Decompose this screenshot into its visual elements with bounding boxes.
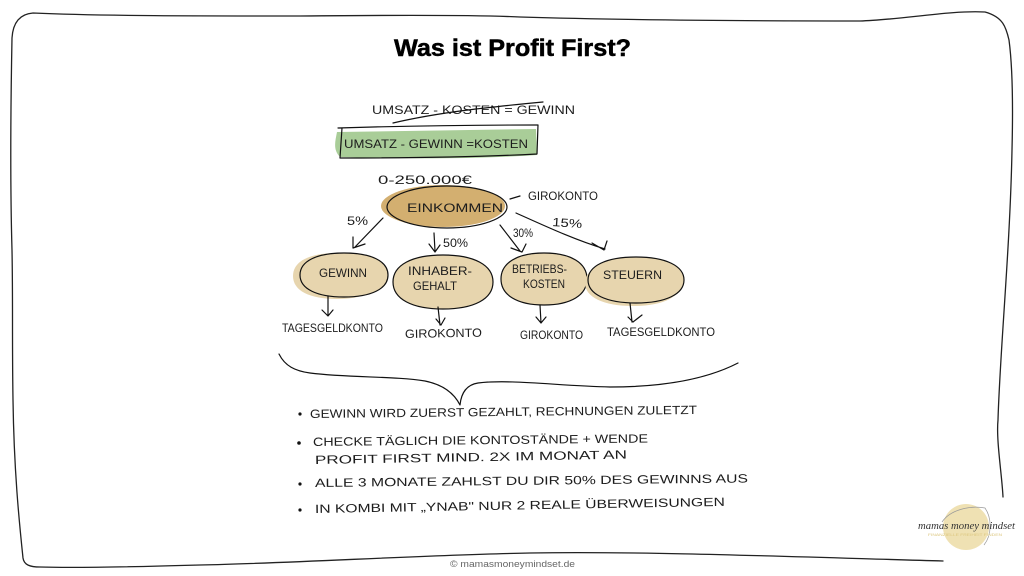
bubble: Gewinn xyxy=(293,253,388,299)
arrow and label: Tagesgeldkonto left xyxy=(282,296,383,335)
bullet list xyxy=(297,403,748,516)
crossed-out formula xyxy=(372,102,575,123)
crossed-out formula: UMSATZ - KOSTEN = GEWINN xyxy=(372,103,575,117)
income account label: GIROKONTO xyxy=(528,189,598,203)
curly brace xyxy=(279,354,738,405)
arrow: 30 percent to Betriebskosten: 30% xyxy=(513,226,533,240)
bubble: Betriebskosten xyxy=(501,253,587,305)
title: Was ist Profit First? xyxy=(394,35,631,62)
bubble: Inhabergehalt: GEHALT xyxy=(413,279,458,293)
bubble: Inhabergehalt: INHABER- xyxy=(408,264,472,278)
arrow and label: Tagesgeldkonto right xyxy=(607,303,715,339)
income range label: 0-250.000€ xyxy=(378,173,472,187)
copyright: © mamasmoneymindset.de xyxy=(450,559,575,570)
income ellipse: EINKOMMEN xyxy=(407,201,503,215)
arrow and label: Tagesgeldkonto right: TAGESGELDKONTO xyxy=(607,325,715,339)
logo: FINANZIELLE FREIHEIT FINDEN xyxy=(928,532,1002,537)
arrow and label: Tagesgeldkonto left: TAGESGELDKONTO xyxy=(282,321,383,335)
bubble: Steuern: STEUERN xyxy=(603,268,662,282)
green highlighted formula box xyxy=(335,125,538,158)
bullet 2: CHECKE TÄGLICH DIE KONTOSTÄNDE + WENDE xyxy=(313,431,648,449)
arrow: 50 percent to Inhabergehalt xyxy=(429,233,468,252)
arrow: 30 percent to Betriebskosten xyxy=(500,225,533,252)
bubble: Steuern xyxy=(585,257,684,306)
arrow: 15 percent to Steuern xyxy=(516,213,607,250)
logo: mamas money mindset xyxy=(918,520,1016,532)
arrow and label: Girokonto left xyxy=(405,307,482,341)
bubble: Inhabergehalt xyxy=(393,255,493,309)
green highlighted formula box: UMSATZ - GEWINN =KOSTEN xyxy=(344,137,528,151)
arrow: 15 percent to Steuern: 15% xyxy=(552,215,583,231)
bullet 3: ALLE 3 MONATE ZAHLST DU DIR 50% DES GEWINNS AUS xyxy=(315,471,748,490)
arrow and label: Girokonto left: GIROKONTO xyxy=(405,326,482,341)
logo xyxy=(918,504,1016,550)
bubble: Gewinn: GEWINN xyxy=(319,266,367,280)
bullet 1: GEWINN WIRD ZUERST GEZAHLT, RECHNUNGEN ZULETZT xyxy=(310,403,698,421)
bullet 4 xyxy=(298,495,725,516)
bullet 4: IN KOMBI MIT „YNAB" NUR 2 REALE ÜBERWEISUNGEN xyxy=(315,495,725,516)
bullet 3 xyxy=(298,471,748,490)
arrow and label: Girokonto right: GIROKONTO xyxy=(520,328,583,342)
bullet 2: PROFIT FIRST MIND. 2X IM MONAT AN xyxy=(315,448,627,467)
arrow: 5 percent to Gewinn: 5% xyxy=(347,214,368,228)
arrow and label: Girokonto right xyxy=(520,305,583,342)
arrow: 50 percent to Inhabergehalt: 50% xyxy=(443,236,468,250)
arrow: 5 percent to Gewinn xyxy=(347,214,383,248)
bubble: Betriebskosten: KOSTEN xyxy=(523,277,565,291)
income ellipse xyxy=(381,185,507,228)
bubble: Betriebskosten: BETRIEBS- xyxy=(512,262,567,276)
bullet 2 xyxy=(297,431,648,467)
